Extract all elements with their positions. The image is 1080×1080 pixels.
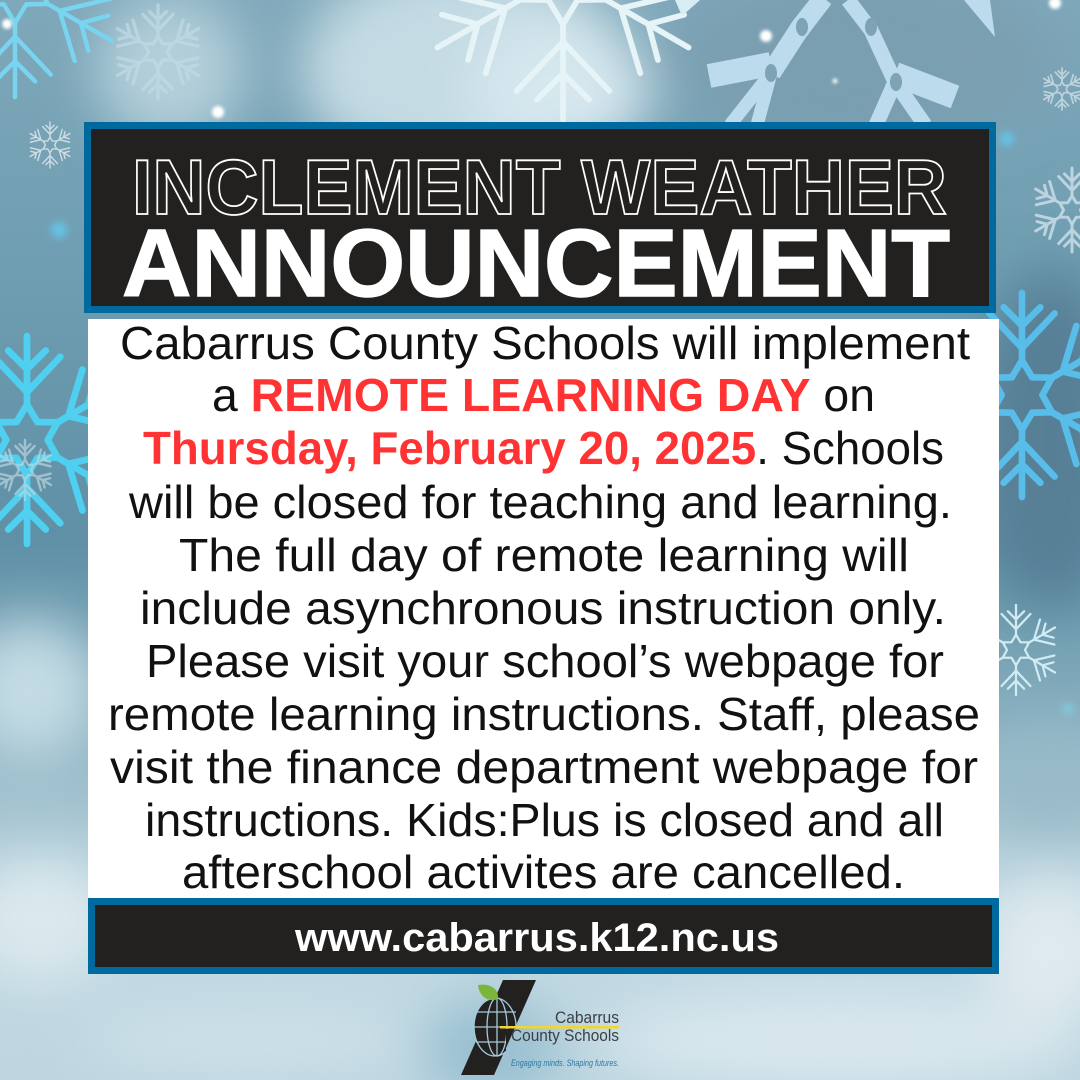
icon: slanted bar with globe [461,980,536,1075]
heading: inclement weather: INCLEMENT WEATHER [132,143,947,231]
big pale flake, top right [709,0,955,125]
logo name: Cabarrus [555,1008,619,1027]
snowflakes [0,0,1080,695]
announcement text: include asynchronous instruction only. [140,582,946,634]
announcement text: instructions. Kids:Plus is closed and all [145,794,944,846]
announcement text: Thursday, February 20, 2025. Schools [143,422,944,474]
announcement text: visit the finance department webpage for [110,741,978,793]
website address: www.cabarrus.k12.nc.us [294,916,779,960]
announcement text: The full day of remote learning will [179,529,909,581]
announcement text: will be closed for teaching and learning. [128,476,952,528]
announcement text: a REMOTE LEARNING DAY on [212,369,875,421]
logo name [511,1008,619,1045]
announcement text [108,317,980,898]
icon: green leaf [478,985,498,1000]
announcement text: Cabarrus County Schools will implement [120,317,970,369]
announcement text: afterschool activites are cancelled. [182,846,905,898]
announcement text: Please visit your school’s webpage for [146,635,944,687]
heading: announcement: ANNOUNCEMENT [122,210,950,317]
announcement text: remote learning instructions. Staff, please [108,688,980,740]
logo: Cabarrus County Schools [461,980,619,1075]
panel: body text [88,317,999,899]
panel: website footer [92,902,996,970]
light dots [2,0,1073,714]
yellow rule [500,1026,619,1028]
logo name: County Schools [511,1026,619,1045]
panel: title banner [88,126,992,317]
logo tagline: Engaging minds. Shaping futures. [511,1058,619,1068]
